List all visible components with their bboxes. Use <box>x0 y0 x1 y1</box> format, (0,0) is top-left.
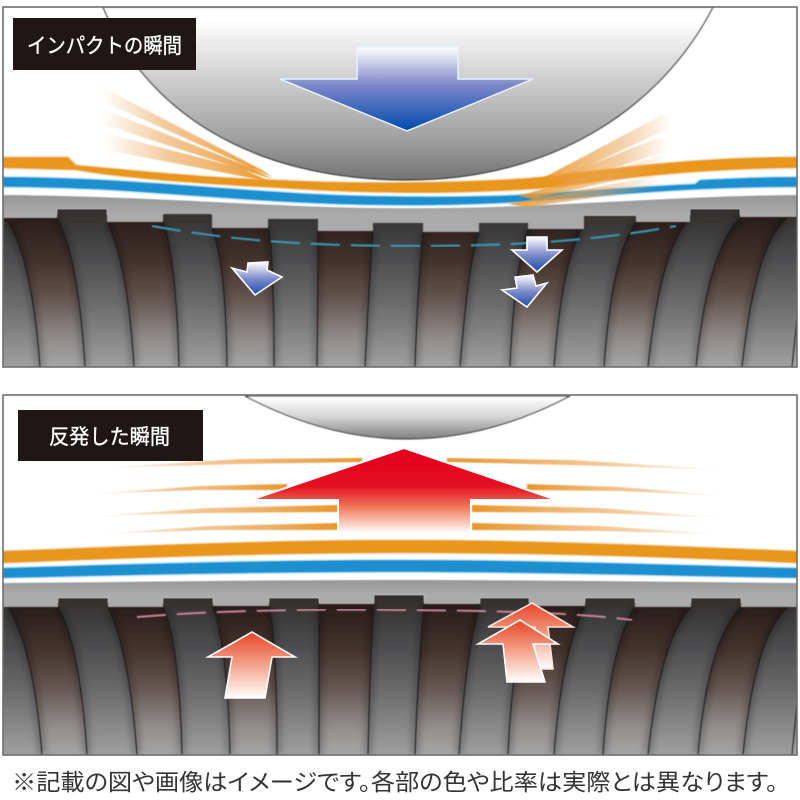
core ribs <box>4 594 796 714</box>
large blue down arrow <box>280 47 533 131</box>
orange cover layer, compressed <box>3 157 797 193</box>
golf ball pressing down <box>103 7 713 180</box>
panel: moment of rebound <box>3 395 797 755</box>
heading label: impact: インパクトの瞬間 <box>27 35 182 58</box>
small red arrow, right rear <box>488 603 573 669</box>
panel border: impact <box>3 7 797 367</box>
blue mantle layer, restored <box>3 560 797 578</box>
large red up arrow <box>250 448 557 533</box>
orange energy streaks, left <box>100 86 272 182</box>
blue mantle layer, compressed <box>3 177 797 205</box>
golf ball lifting off <box>245 396 570 439</box>
panel border: rebound <box>3 395 797 755</box>
orange energy streaks, left <box>90 458 362 534</box>
grey belt band <box>3 195 797 232</box>
heading label: impact <box>13 18 196 70</box>
footnote: ※記載の図や画像はイメージです。各部の色や比率は実際とは異なります。 <box>12 769 778 795</box>
small red arrow, left <box>208 632 295 698</box>
small red arrow, right front <box>478 620 558 682</box>
small blue arrow, lower right <box>502 275 547 307</box>
heading label: rebound: 反発した瞬間 <box>49 426 170 449</box>
rebound dashed line, pink <box>137 610 632 620</box>
orange energy streaks, right <box>447 458 727 534</box>
orange cover layer, restored <box>3 540 797 563</box>
small blue arrow, upper right <box>512 237 562 272</box>
panel: moment of impact <box>3 7 797 367</box>
grey belt band <box>3 580 797 607</box>
small blue arrow, left <box>232 262 282 295</box>
deformation dashed line, teal <box>152 226 676 246</box>
tyre tread ridged core <box>3 209 797 367</box>
core ribs <box>4 208 796 326</box>
heading label: rebound <box>18 410 203 461</box>
tyre tread ridged core <box>3 595 797 755</box>
orange energy streaks, right <box>508 115 674 207</box>
